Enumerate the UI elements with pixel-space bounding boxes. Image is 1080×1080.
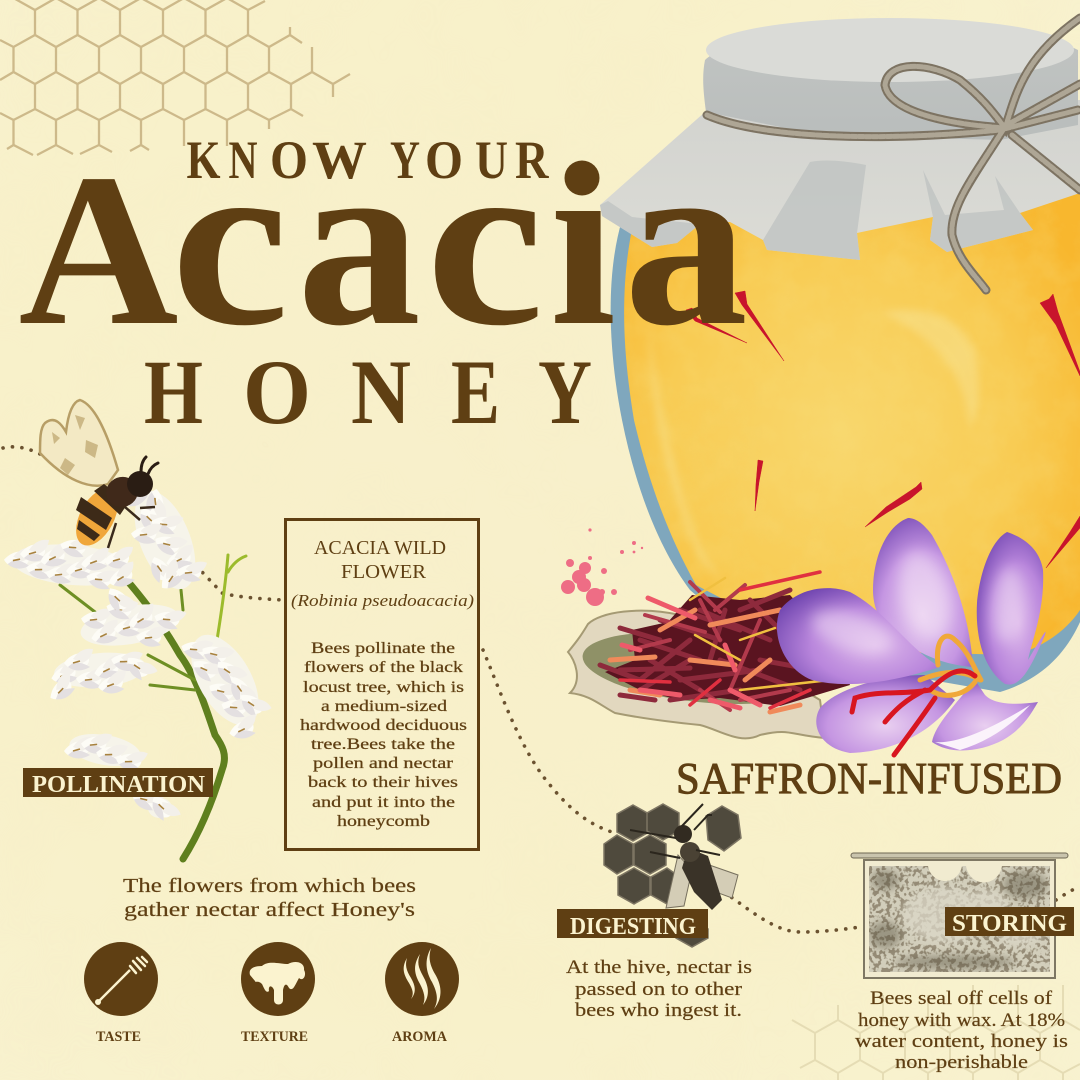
icon: honeycomb with bee xyxy=(604,804,741,947)
title: honey: H xyxy=(144,341,203,443)
label: digesting: DIGESTING xyxy=(570,914,696,940)
text: flowers affect honey xyxy=(123,875,416,921)
text: digesting description xyxy=(566,958,752,1021)
text: storing description: water content, honey is xyxy=(855,1032,1068,1052)
panel heading: FLOWER xyxy=(341,561,427,583)
bee legs and antennae xyxy=(630,804,720,858)
icon: taste honey dipper xyxy=(84,942,158,1016)
bee wings xyxy=(40,400,118,486)
top bar xyxy=(851,853,1068,858)
title: acacia xyxy=(20,160,744,326)
acacia wild flower branch xyxy=(3,478,273,859)
left petal xyxy=(777,588,940,684)
panel: acacia wild flower xyxy=(286,520,478,850)
title: know your: K xyxy=(186,130,220,190)
comb light centre xyxy=(903,887,1042,945)
panel body text: and put it into the xyxy=(312,794,455,811)
title: know your: R xyxy=(515,130,549,190)
title: know your: N xyxy=(228,130,258,190)
title: acacia: a xyxy=(624,106,748,376)
bee stripes xyxy=(76,484,128,541)
icon: hive frame xyxy=(851,853,1068,978)
cloth top band xyxy=(703,24,1078,140)
saffron plate and threads xyxy=(568,572,850,738)
jar cloth skirt xyxy=(600,100,1080,260)
panel body text: pollen and nectar xyxy=(313,755,454,772)
title: acacia: c xyxy=(171,106,289,376)
comb xyxy=(869,866,1050,972)
bee abdomen xyxy=(67,482,127,552)
panel heading: ACACIA WILD xyxy=(314,537,446,559)
plate xyxy=(568,611,825,738)
honey jar illustration xyxy=(600,18,1080,692)
title: acacia: c xyxy=(426,106,544,376)
label: pollination: POLLINATION xyxy=(32,772,206,798)
icon: texture drip xyxy=(241,942,315,1016)
text: storing description: non-perishable xyxy=(895,1053,1028,1073)
lower left petal xyxy=(816,675,955,753)
title: honey: Y xyxy=(538,341,592,443)
bee wings xyxy=(666,855,738,908)
icon: aroma waves xyxy=(385,942,459,1016)
bee head xyxy=(127,471,153,497)
honey texture xyxy=(624,206,1080,654)
title: know your: Y xyxy=(390,130,420,190)
panel body text: locust tree, which is xyxy=(303,679,464,696)
pink saffron splatter xyxy=(561,528,643,606)
text: storing description xyxy=(855,989,1068,1073)
bee wing markings xyxy=(52,415,98,475)
text: flowers affect honey: gather nectar affect Honey's xyxy=(124,899,415,921)
text: digesting description: At the hive, nectar is xyxy=(566,958,752,978)
panel body text xyxy=(300,640,467,830)
top petal light xyxy=(890,546,960,644)
saffron crocus flower xyxy=(777,518,1046,755)
panel body text: tree.Bees take the xyxy=(311,736,455,753)
panel body text: Bees pollinate the xyxy=(311,640,455,657)
lower right petal xyxy=(932,680,1038,750)
right petal xyxy=(977,532,1046,685)
heading: saffron-infused: SAFFRON-INFUSED xyxy=(676,754,1062,803)
title: know your: U xyxy=(475,130,508,190)
dotted route lines xyxy=(3,447,1080,932)
title: acacia: i xyxy=(550,106,616,376)
rope xyxy=(707,18,1080,290)
branch stems xyxy=(60,555,246,859)
title: honey: E xyxy=(451,341,500,443)
honey highlights xyxy=(648,310,979,590)
label: taste: TASTE xyxy=(96,1029,141,1045)
label: texture: TEXTURE xyxy=(241,1029,308,1045)
left petal light xyxy=(806,602,898,662)
label: aroma: AROMA xyxy=(392,1029,448,1045)
bee legs xyxy=(108,507,155,548)
text: flowers affect honey: The flowers from which bees xyxy=(123,875,416,897)
cloth folds xyxy=(600,161,1033,260)
title: know your: O xyxy=(425,130,463,190)
jar glass rim xyxy=(611,170,1080,692)
cloth top xyxy=(706,18,1074,82)
panel body text: a medium-sized xyxy=(321,698,447,715)
panel body text: hardwood deciduous xyxy=(300,717,467,734)
comb dark patches xyxy=(869,870,1047,969)
bee thorax xyxy=(102,472,142,512)
plate well xyxy=(579,622,821,714)
title: honey: N xyxy=(351,341,411,443)
bee antennae xyxy=(141,457,158,474)
text: digesting description: bees who ingest it. xyxy=(575,1001,742,1021)
panel body text: flowers of the black xyxy=(304,659,463,676)
title: know your: W xyxy=(312,130,367,190)
top petal xyxy=(873,518,973,667)
bloom cluster backings xyxy=(10,482,273,818)
label: storing: STORING xyxy=(952,911,1067,937)
panel body text: honeycomb xyxy=(337,813,430,830)
saffron threads in honey xyxy=(686,291,1080,568)
latin name: (Robinia pseudoacacia) xyxy=(291,591,474,610)
saffron heap xyxy=(605,595,850,706)
saffron threads xyxy=(600,572,830,712)
text: storing description: honey with wax. At 18% xyxy=(858,1011,1065,1031)
panel heading xyxy=(314,537,446,583)
comb cell texture xyxy=(869,866,1050,972)
text: digesting description: passed on to other xyxy=(575,980,742,1000)
blooms xyxy=(3,546,34,570)
honey body xyxy=(624,170,1080,655)
title: know your: O xyxy=(270,130,308,190)
honeycomb pattern top left xyxy=(0,0,350,155)
bee body xyxy=(682,848,722,910)
right petal light xyxy=(990,566,1026,644)
title: acacia: A xyxy=(18,130,179,371)
panel body text: back to their hives xyxy=(308,774,458,791)
title: honey: O xyxy=(243,341,311,443)
stamens xyxy=(852,636,981,755)
title: acacia: a xyxy=(297,106,421,376)
text: storing description: Bees seal off cells of xyxy=(870,989,1053,1009)
lower right petal centre xyxy=(935,705,1030,750)
honeycomb pattern bottom right xyxy=(792,985,1080,1080)
bee illustration xyxy=(40,400,158,552)
